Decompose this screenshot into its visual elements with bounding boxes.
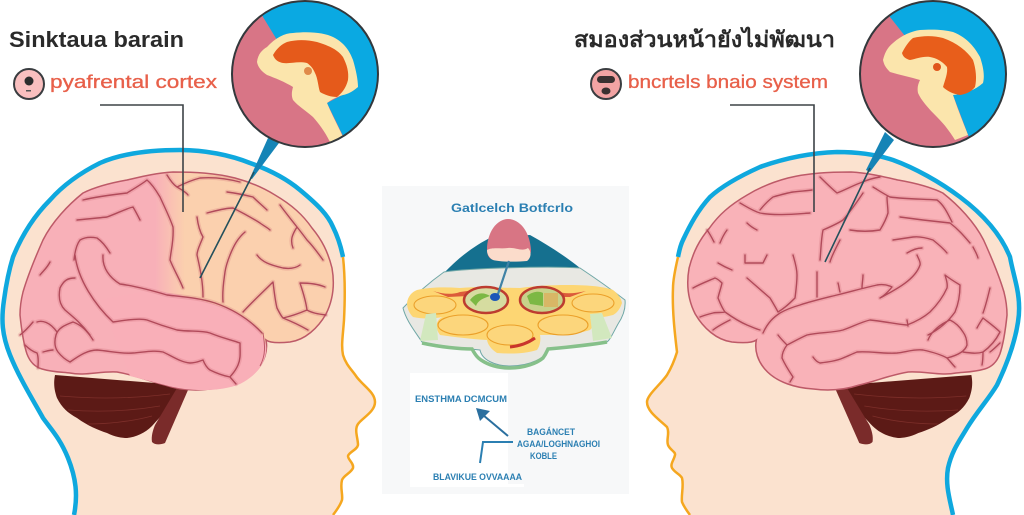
panel: left head with brain xyxy=(2,105,375,515)
cups xyxy=(464,287,508,313)
face outline xyxy=(333,257,375,515)
note: right: BAGÁNCET xyxy=(527,427,575,437)
brain xyxy=(20,172,333,390)
centre heading: Gatlcelch Botfcrlo xyxy=(451,203,573,215)
head back outline xyxy=(2,150,343,515)
arrow xyxy=(476,408,508,436)
panel: centre diagram xyxy=(382,186,629,494)
zoom pointer xyxy=(866,132,894,172)
label: prefrontal cortex: pyafrental cortex xyxy=(50,72,217,92)
brain stem xyxy=(152,388,188,444)
probe xyxy=(498,261,509,294)
note: bottom: BLAVIKUE OVVAAAA xyxy=(433,472,522,483)
blue cone xyxy=(444,235,580,273)
mirrored brain shapes xyxy=(688,172,1007,444)
head back outline xyxy=(678,152,1019,515)
brain sulci xyxy=(693,177,1000,382)
red accent xyxy=(510,338,535,347)
panel: right head with brain xyxy=(647,105,1019,515)
white notes area xyxy=(410,373,524,487)
discs xyxy=(414,294,614,345)
cerebellum xyxy=(844,375,972,438)
cerebellum xyxy=(54,375,180,438)
head silhouette xyxy=(2,150,375,515)
orange rim xyxy=(433,288,586,297)
inset: left magnifier circle xyxy=(231,0,379,148)
dish illustration xyxy=(403,219,625,368)
face outline xyxy=(647,257,690,515)
note: top: ENSTHMA DCMCUM xyxy=(415,394,507,405)
temporal lobe xyxy=(100,290,266,390)
brain stem xyxy=(836,388,873,444)
title: right: สมองส่วนหน้ายังไม่พัฒนา xyxy=(574,26,835,52)
brain xyxy=(688,172,1007,390)
inset: right magnifier circle xyxy=(859,0,1007,148)
note: right xyxy=(517,427,600,461)
zoom pointer xyxy=(250,138,279,179)
callout line xyxy=(100,105,183,212)
pale green side tabs xyxy=(420,313,438,341)
connector line xyxy=(480,442,513,463)
callout line xyxy=(730,105,814,212)
green base rim xyxy=(422,342,607,368)
brain sulci xyxy=(20,175,326,384)
icon: right bullet xyxy=(591,69,621,99)
title: left: Sinktaua barain xyxy=(9,27,184,52)
note: right: KOBLE xyxy=(530,451,557,461)
pink dome xyxy=(487,219,531,260)
label: basic brain system: bncrtels bnaio system xyxy=(628,72,828,92)
icon: left bullet xyxy=(14,69,44,99)
head silhouette xyxy=(647,152,1019,515)
yellow tray xyxy=(407,285,622,354)
dish body xyxy=(403,267,625,366)
note: right: AGAA/LOGHNAGHOI xyxy=(517,439,600,449)
